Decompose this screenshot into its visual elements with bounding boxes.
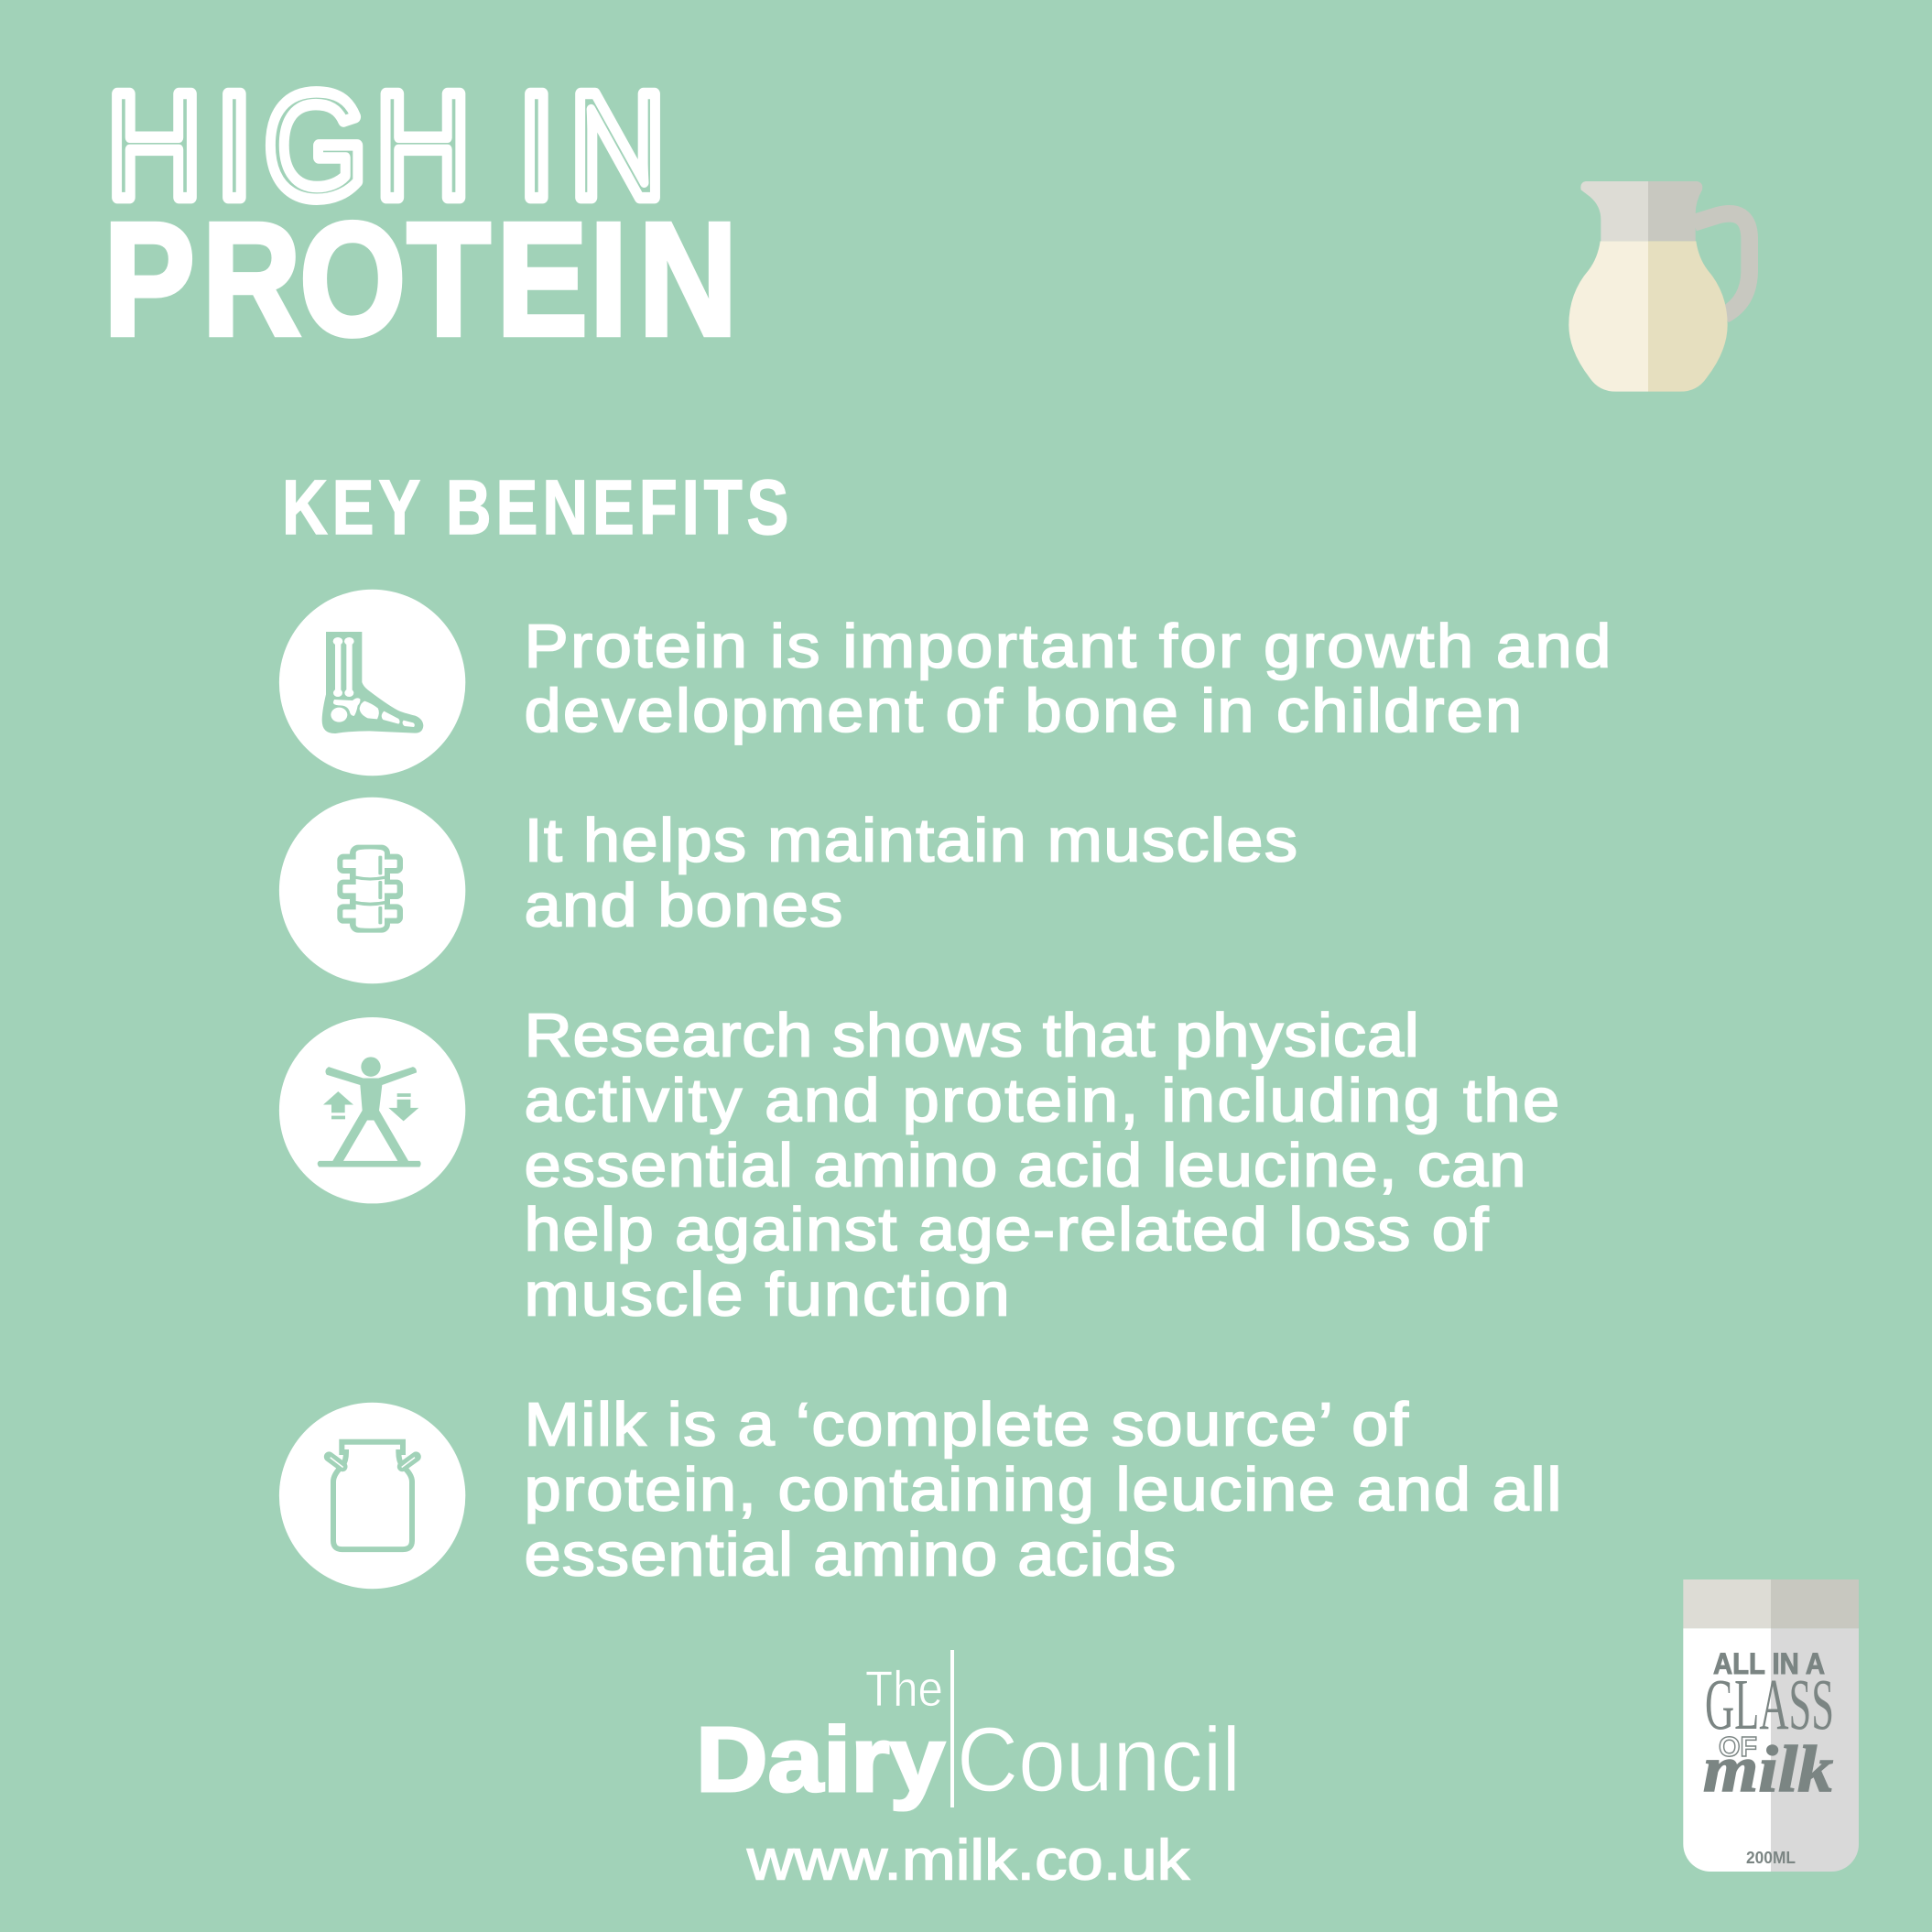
panel: benefit 2 muscles and bones	[279, 798, 1297, 983]
glass label text: GLASS	[1705, 1666, 1834, 1745]
glass label text: milk	[1703, 1732, 1833, 1806]
text: benefit 3: Research shows that physical	[524, 1001, 1419, 1069]
logo: The Dairy Council: The	[865, 1660, 943, 1717]
glass label text: 200ML	[1746, 1849, 1796, 1867]
text: benefit 1: Protein is important for growth and	[524, 612, 1611, 680]
icon: milk churn	[279, 1403, 465, 1589]
icon: person with arrows	[279, 1017, 465, 1203]
text: benefit 3: muscle function	[524, 1260, 1010, 1329]
text: benefit 3: activity and protein, including the	[524, 1066, 1559, 1134]
text: benefit 4: Milk is a ‘complete source’ of	[524, 1390, 1409, 1459]
text: benefit 3: help against age-related loss of	[524, 1195, 1489, 1264]
logo: The Dairy Council	[696, 1650, 1241, 1811]
title line: HIGH IN: HIGH IN	[106, 61, 666, 230]
icon: foot x-ray	[279, 590, 465, 776]
glass label text: OF	[1719, 1731, 1757, 1763]
panel: benefit 4 complete protein	[279, 1390, 1561, 1589]
text: benefit 4	[524, 1390, 1561, 1589]
text: benefit 1	[524, 612, 1611, 744]
panel: benefit 3 physical activity	[279, 1001, 1559, 1329]
glass label text	[1703, 1647, 1834, 1867]
panel: benefit 1 bone growth	[279, 590, 1611, 776]
icon: spine	[279, 798, 465, 983]
text: benefit 4: protein, containing leucine and all	[524, 1455, 1561, 1524]
text: benefit 2: and bones	[524, 871, 842, 939]
text: benefit 3	[524, 1001, 1559, 1329]
text: benefit 3: essential amino acid leucine, can	[524, 1131, 1526, 1199]
text: benefit 2	[524, 806, 1297, 939]
title line: PROTEIN: PROTEIN	[103, 189, 737, 369]
logo: The Dairy Council: Dairy	[696, 1709, 945, 1811]
text: benefit 4: essential amino acids	[524, 1520, 1176, 1589]
text: benefit 2: It helps maintain muscles	[524, 806, 1297, 874]
text: benefit 1: development of bone in children	[524, 676, 1522, 744]
website url: www.milk.co.uk	[746, 1829, 1190, 1892]
title	[103, 61, 737, 369]
heading: key benefits: KEY BENEFITS	[282, 465, 788, 551]
icon: glass of milk	[1683, 1579, 1859, 1872]
icon: milk jug	[1568, 181, 1750, 392]
title line: HIGH IN: HIGH IN	[106, 61, 666, 230]
glass label text: ALL IN A	[1713, 1647, 1825, 1680]
logo: The Dairy Council: Council	[957, 1709, 1241, 1811]
